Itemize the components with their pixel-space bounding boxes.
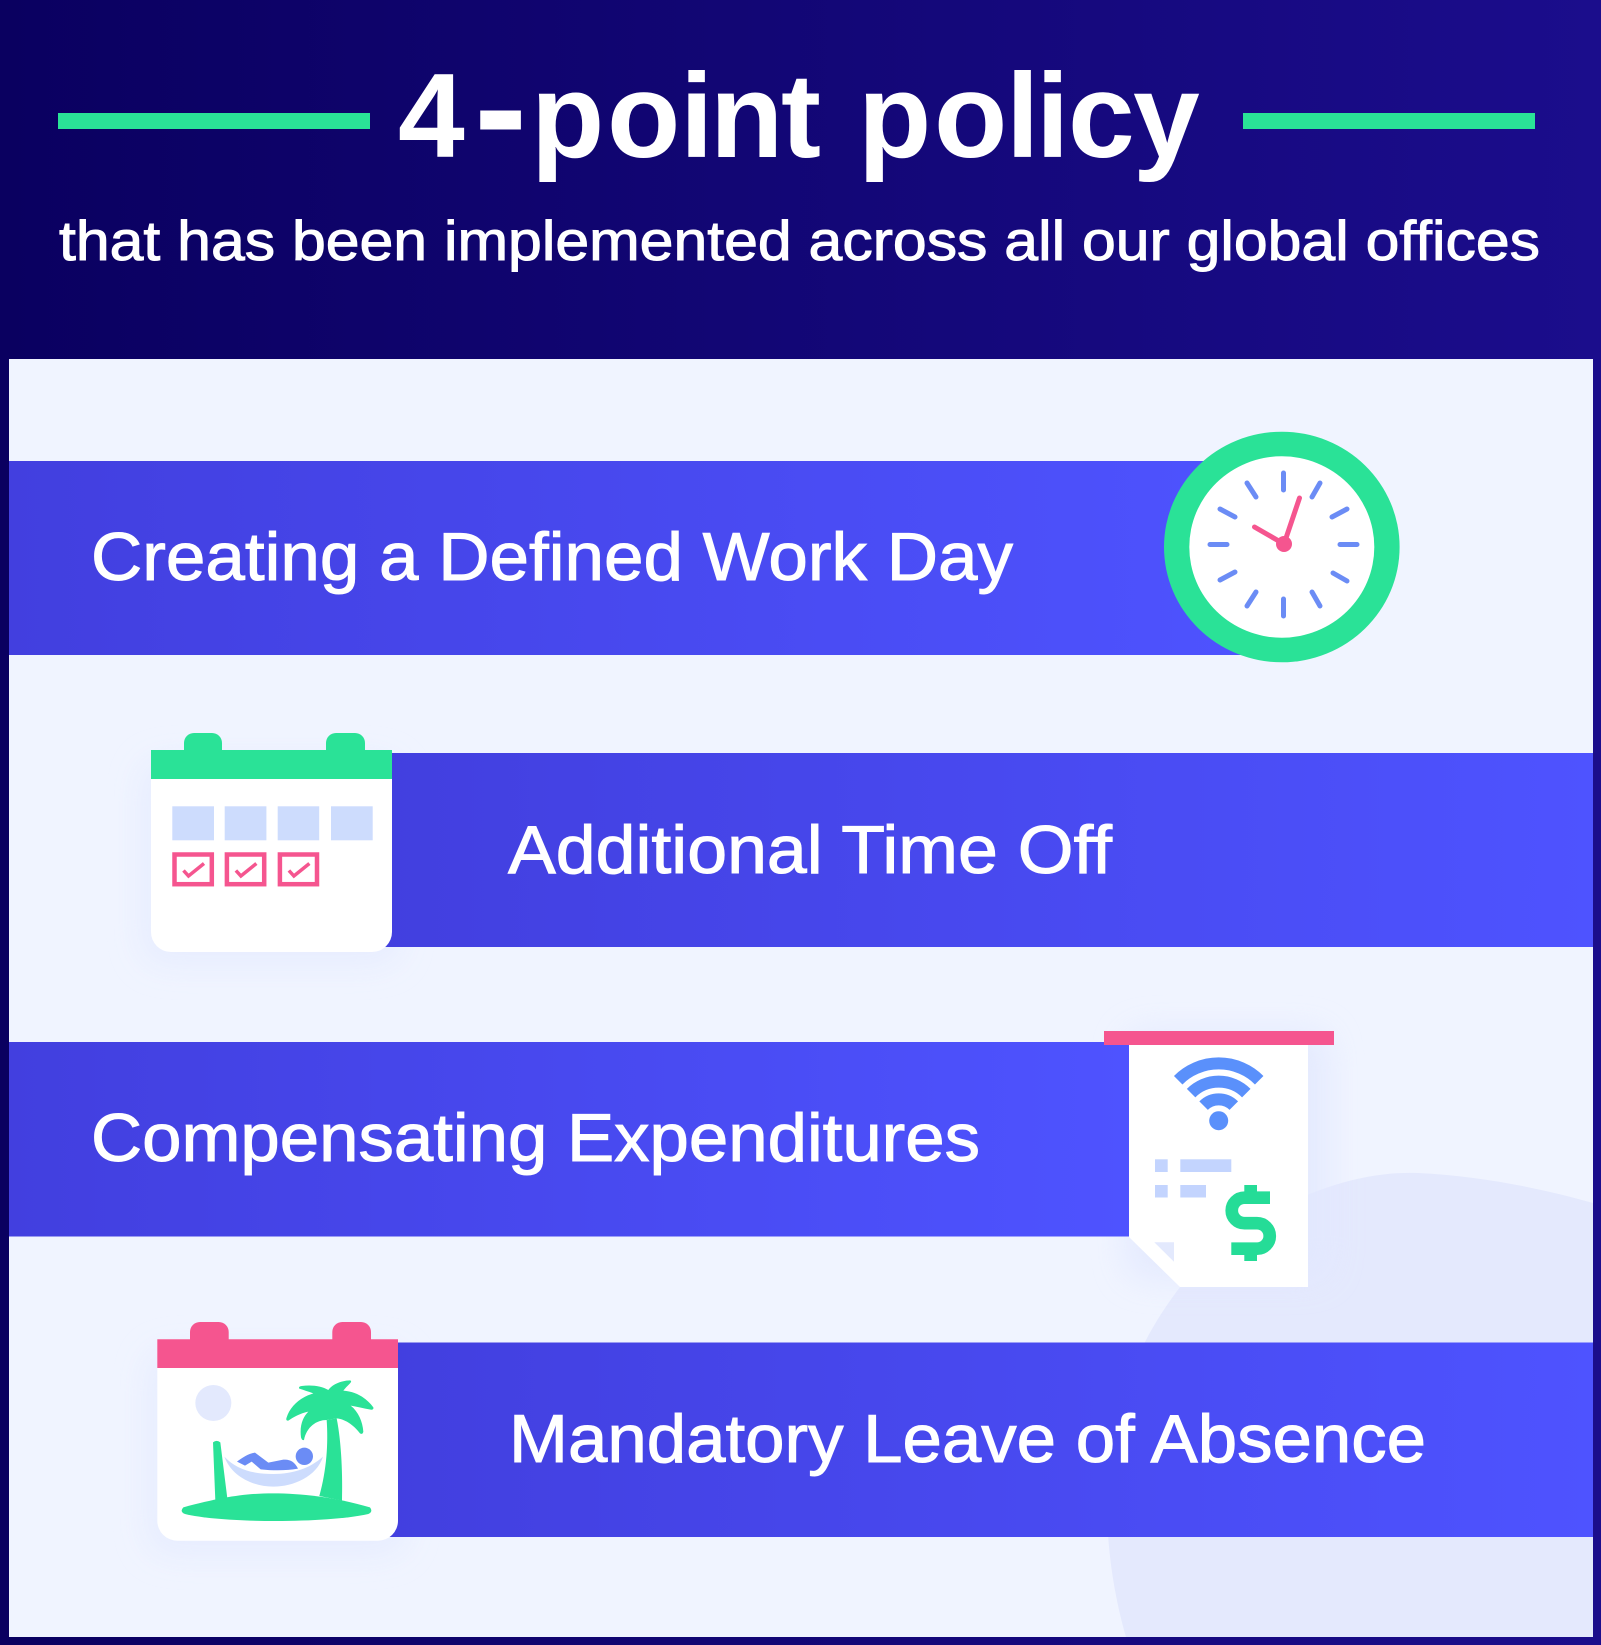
title text: point policy	[531, 49, 1200, 183]
icon: expense document	[1104, 1031, 1334, 1287]
row 3 label: Compensating Expenditures	[91, 1100, 980, 1176]
title	[58, 16, 1535, 196]
row 2: additional time off	[141, 733, 1593, 965]
row 3 bar	[9, 1042, 1129, 1236]
row 1 bar	[9, 461, 1269, 655]
icon: calendar with checks	[151, 733, 392, 952]
title text: -	[474, 16, 527, 196]
row 4 bar	[385, 1342, 1593, 1537]
icon: clock	[1164, 432, 1400, 662]
icon: vacation calendar	[157, 1322, 398, 1541]
row 2 label: Additional Time Off	[508, 812, 1112, 888]
row 1 label: Creating a Defined Work Day	[91, 519, 1013, 595]
row 1: creating a defined work day	[9, 432, 1400, 662]
row 4 label: Mandatory Leave of Absence	[509, 1401, 1426, 1477]
title text: 4	[398, 49, 465, 183]
title line right	[1243, 113, 1535, 129]
subtitle: that has been implemented across all our global offices	[59, 209, 1540, 272]
row 4: mandatory leave of absence	[147, 1322, 1593, 1555]
title line left	[58, 113, 370, 129]
row 2 bar	[380, 753, 1593, 947]
row 3: compensating expenditures	[9, 1030, 1334, 1287]
panel: content background	[9, 359, 1593, 1637]
